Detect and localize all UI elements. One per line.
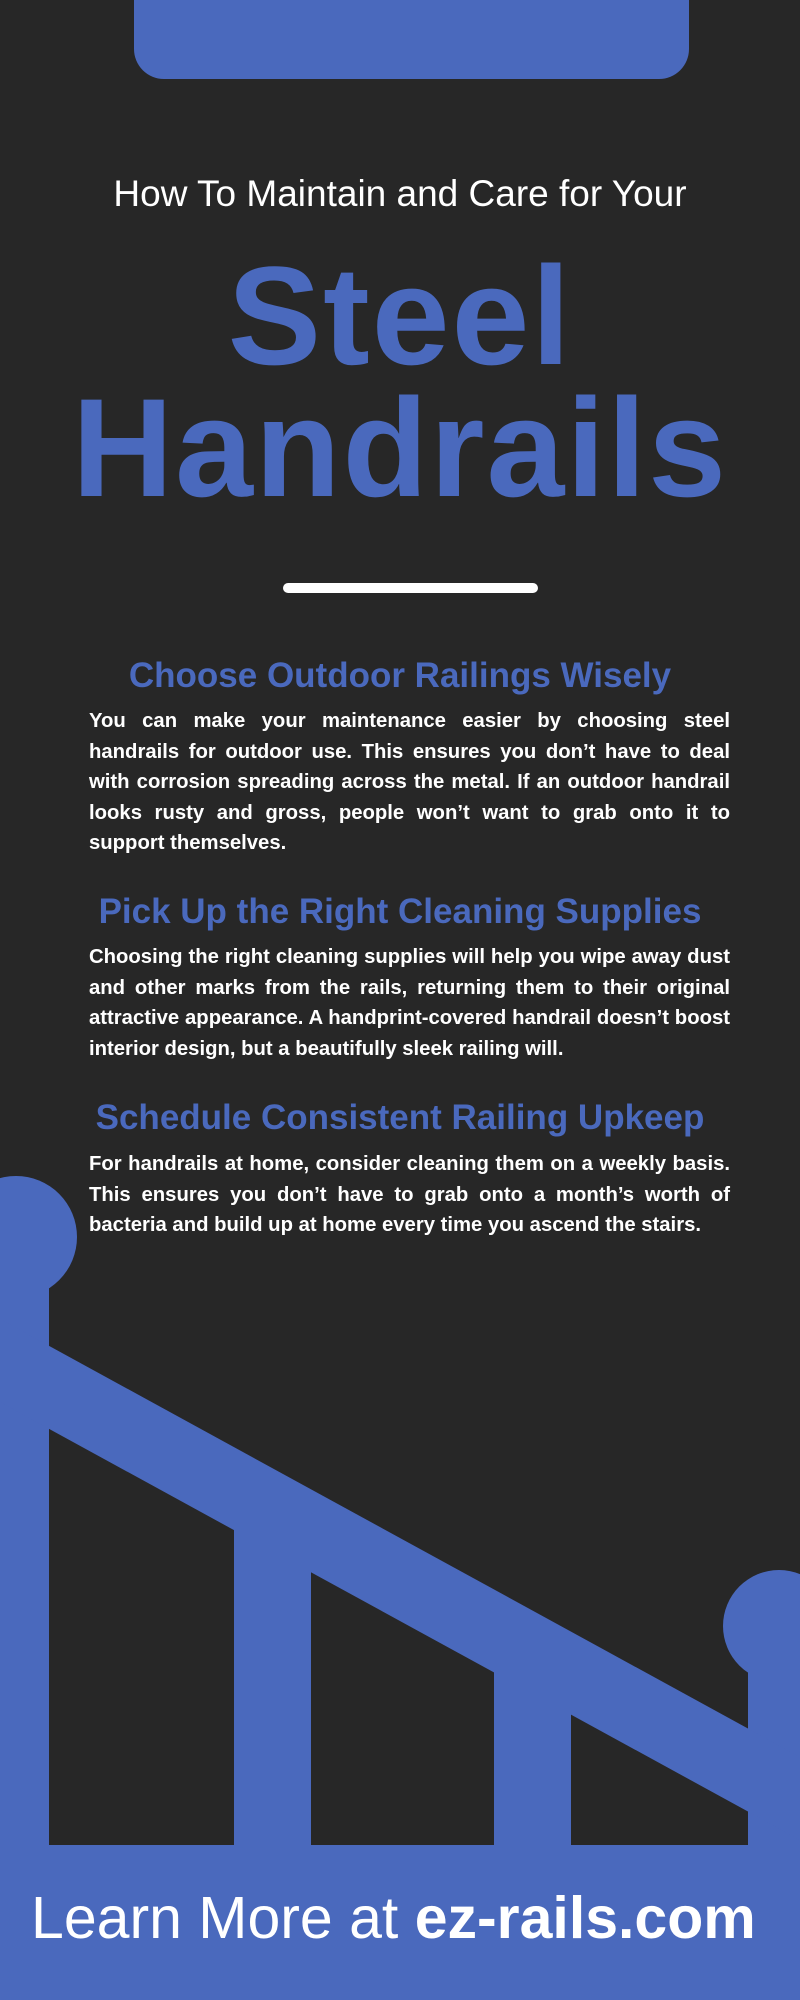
heading: consistent upkeep: Schedule Consistent Railing Upkeep [96, 1098, 704, 1137]
text: consistent upkeep: For handrails at home, consider cleaning them on a weekly basis. This ensures you don’t have to grab onto a month’s worth of bacteria and build up at home every time you ascend the stairs. [89, 1153, 730, 1236]
heading: cleaning supplies: Pick Up the Right Cleaning Supplies [99, 892, 701, 931]
title: Handrails [72, 369, 728, 526]
footer call to action: Learn More at ez-rails.com [31, 1885, 756, 1951]
text: cleaning supplies: Choosing the right cleaning supplies will help you wipe away dust and other marks from the rails, returning them to their original attractive appearance. A handprint-covered handrail doesn’t boost interior design, but a beautifully sleek railing will. [89, 946, 730, 1060]
text: choose outdoor railings: You can make your maintenance easier by choosing steel handrails for outdoor use. This ensures you don’t have to deal with corrosion spreading across the metal. If an outdoor handrail looks rusty and gross, people won’t want to grab onto it to support themselves. [89, 710, 730, 854]
title: Steel [228, 237, 572, 394]
subtitle: How To Maintain and Care for Your [113, 173, 687, 214]
heading: choose outdoor railings: Choose Outdoor Railings Wisely [129, 656, 671, 695]
divider line [283, 583, 538, 593]
title [72, 237, 728, 526]
top bar [134, 0, 689, 79]
